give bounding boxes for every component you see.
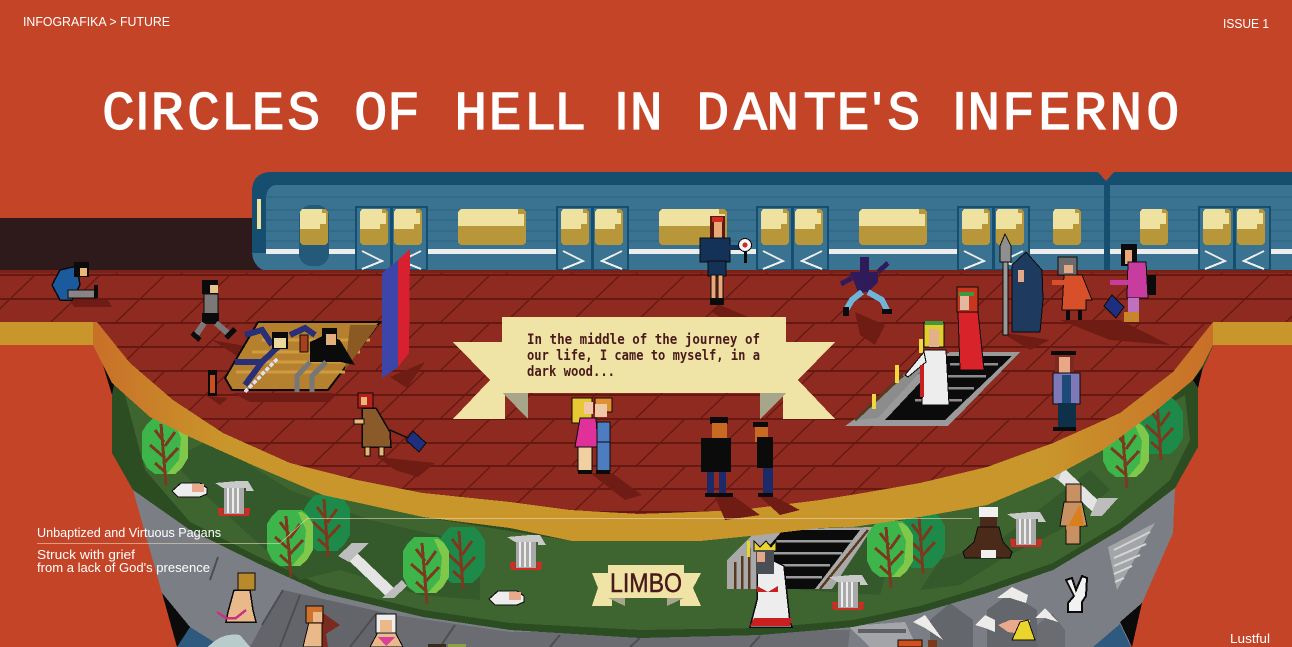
callout leader line bbox=[37, 518, 972, 544]
corner shadows bbox=[103, 365, 1203, 395]
couple in storm bbox=[998, 620, 1035, 640]
gold strips at the platform sides bbox=[0, 322, 1292, 345]
kissing couple bbox=[572, 398, 612, 474]
tree bbox=[403, 537, 449, 604]
fallen column bbox=[1048, 463, 1118, 516]
tornado lower bbox=[848, 622, 917, 647]
sleeping baby bbox=[172, 483, 207, 497]
tornado bbox=[1108, 523, 1155, 590]
meditating brahmin bbox=[963, 507, 1012, 558]
person in brown coat with suitcase bbox=[354, 393, 426, 456]
stairway down to limbo bbox=[845, 339, 1020, 426]
tree bbox=[304, 495, 350, 557]
header: issue: ISSUE 1 bbox=[1223, 16, 1269, 31]
mountains bbox=[930, 593, 1065, 647]
column bbox=[507, 535, 546, 570]
monk bbox=[1060, 484, 1087, 544]
rabbit icon bbox=[1066, 576, 1087, 612]
walking man bbox=[192, 280, 235, 340]
white peaks bbox=[913, 587, 1058, 640]
white robed virgil bbox=[905, 321, 949, 405]
small orange figure bbox=[208, 370, 217, 396]
red and blue column flag bbox=[382, 249, 410, 378]
bench with two people bbox=[225, 322, 380, 392]
hooded charon with spear bbox=[1000, 234, 1043, 335]
limbo label: LIMBO bbox=[610, 568, 682, 598]
limbo banner bbox=[592, 565, 701, 606]
callout: unbaptized and virtuous pagans: Unbaptized and Virtuous Pagans bbox=[37, 525, 221, 540]
suitcase bbox=[1104, 295, 1124, 318]
quote text bbox=[527, 332, 760, 380]
two men in black bbox=[701, 417, 773, 497]
woman with white hair bbox=[370, 614, 403, 647]
escalator down from platform bbox=[727, 527, 873, 589]
callout: unbaptized and virtuous pagans: Struck with grief bbox=[37, 547, 135, 562]
dark tunnel band bbox=[0, 218, 265, 271]
man in lavender jacket with hat bbox=[1051, 351, 1080, 431]
king in white robe bbox=[747, 541, 792, 627]
gold platform edge bbox=[0, 322, 1292, 541]
tree bbox=[899, 512, 945, 574]
tree bbox=[1103, 421, 1149, 488]
label: lustful: Lustful bbox=[1230, 631, 1270, 646]
passenger in orange coat bbox=[1052, 257, 1092, 320]
metro train bbox=[252, 172, 1292, 271]
tree bbox=[439, 527, 485, 589]
header: breadcrumb: INFOGRAFIKA > FUTURE bbox=[23, 14, 170, 29]
winged nude bbox=[303, 606, 340, 647]
tree bbox=[1137, 398, 1183, 460]
metro conductor with signal paddle bbox=[700, 216, 752, 305]
column bbox=[1007, 512, 1046, 547]
quote text: our life, I came to myself, in a bbox=[527, 348, 760, 364]
tree bbox=[267, 510, 313, 577]
column bbox=[829, 575, 868, 610]
quote banner bbox=[453, 317, 835, 419]
figure shadows bbox=[70, 300, 1170, 520]
title: CIRCLES OF HELL IN DANTE'S INFERNO bbox=[102, 82, 1179, 146]
running figure in purple bbox=[841, 257, 892, 316]
sitting man with laptop bbox=[52, 262, 98, 300]
brick platform floor bbox=[0, 216, 1292, 520]
limbo circle: green ground bbox=[93, 340, 1213, 638]
figures cut off at the bottom bbox=[428, 640, 937, 647]
gray lower circle: lustful bbox=[133, 488, 1175, 647]
callout: unbaptized and virtuous pagans: from a lack of God's presence bbox=[37, 560, 210, 575]
red robed dante bbox=[957, 287, 984, 370]
quote text: In the middle of the journey of bbox=[527, 332, 760, 348]
tree bbox=[142, 418, 188, 485]
callout: unbaptized and virtuous pagans bbox=[37, 525, 221, 575]
tree bbox=[867, 521, 913, 588]
quote text: dark wood... bbox=[527, 364, 615, 380]
dog woman bbox=[217, 573, 256, 622]
column bbox=[215, 481, 254, 516]
woman in magenta coat bbox=[1110, 244, 1156, 322]
fallen column bbox=[338, 543, 407, 598]
sleeping baby bbox=[489, 591, 524, 605]
